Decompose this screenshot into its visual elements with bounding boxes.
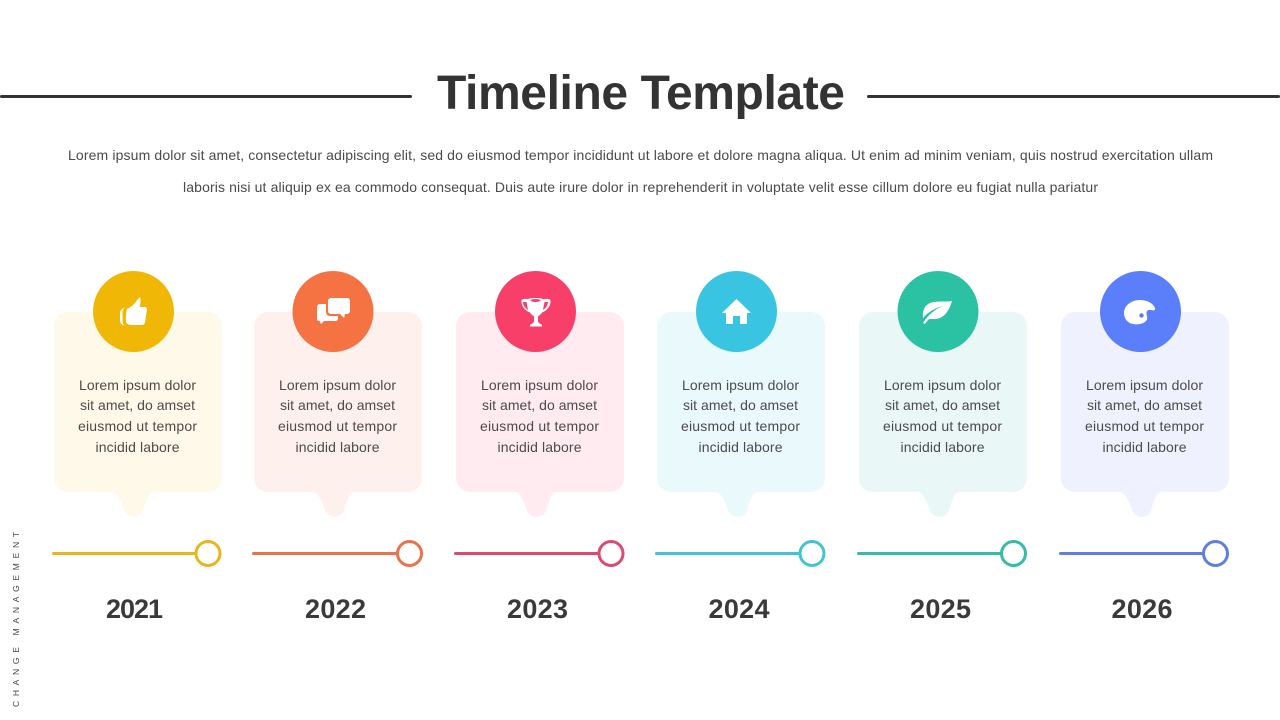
title: Timeline Template <box>437 67 845 120</box>
card text 2023: sit amet, do amset <box>482 397 597 413</box>
icon: thumbs up <box>93 271 174 352</box>
card text 2023: incidid labore <box>498 439 582 455</box>
icon: palette <box>1100 271 1181 352</box>
card text 2025 <box>883 377 1002 455</box>
intro text: laboris nisi ut aliquip ex ea commodo consequat. Duis aute irure dolor in reprehenderit in voluptate velit esse cillum dolore eu fugiat nulla pariatur <box>183 179 1098 195</box>
icon: speech bubbles <box>292 271 374 352</box>
card text 2023: Lorem ipsum dolor <box>481 377 598 393</box>
panel: 2025 <box>857 271 1027 624</box>
card text 2026: eiusmod ut tempor <box>1085 418 1204 434</box>
card 2025 <box>859 312 1027 517</box>
card text 2021 <box>78 377 197 455</box>
card text 2022: eiusmod ut tempor <box>278 418 397 434</box>
card text 2021: eiusmod ut tempor <box>78 418 197 434</box>
card 2024 <box>657 312 825 517</box>
card text 2025: sit amet, do amset <box>885 397 1000 413</box>
timeline marker 2022 <box>252 542 422 566</box>
panel: 2026 <box>1059 271 1229 624</box>
year 2021: 2021 <box>106 594 163 624</box>
panel: 2024 <box>655 271 825 624</box>
card text 2024 <box>681 377 800 455</box>
year 2026: 2026 <box>1112 594 1172 624</box>
year 2022: 2022 <box>305 594 366 624</box>
panel: 2023 <box>454 271 624 624</box>
icon: leaf <box>898 271 978 352</box>
year 2025: 2025 <box>910 594 971 624</box>
timeline marker 2023 <box>454 542 623 566</box>
panel: 2022 <box>252 271 422 624</box>
card text 2024: eiusmod ut tempor <box>681 418 800 434</box>
icon: trophy <box>495 271 576 352</box>
year 2023: 2023 <box>507 594 568 624</box>
timeline marker 2021 <box>52 542 220 566</box>
card text 2022: sit amet, do amset <box>280 397 395 413</box>
card 2026 <box>1061 312 1229 517</box>
card text 2025: eiusmod ut tempor <box>883 418 1002 434</box>
card text 2022: incidid labore <box>296 439 380 455</box>
timeline marker 2025 <box>857 542 1026 566</box>
card text 2025: incidid labore <box>900 439 985 455</box>
card text 2023 <box>480 377 599 455</box>
intro text <box>68 147 1213 195</box>
card text 2026: sit amet, do amset <box>1087 397 1202 413</box>
card text 2026 <box>1085 377 1204 455</box>
card text 2025: Lorem ipsum dolor <box>884 377 1001 393</box>
title <box>0 67 1280 120</box>
card text 2022 <box>278 377 397 455</box>
card text 2026: incidid labore <box>1102 439 1187 455</box>
panel: 2021 <box>52 271 222 624</box>
timeline marker 2026 <box>1059 542 1228 566</box>
card text 2024: sit amet, do amset <box>683 397 798 413</box>
card text 2021: Lorem ipsum dolor <box>79 377 196 393</box>
card 2023 <box>456 312 624 517</box>
card text 2024: incidid labore <box>698 439 783 455</box>
card text 2022: Lorem ipsum dolor <box>279 377 396 393</box>
card 2022 <box>254 312 422 517</box>
card text 2024: Lorem ipsum dolor <box>682 377 799 393</box>
vertical side label: CHANGE MANAGEMENT <box>11 532 21 707</box>
year 2024: 2024 <box>708 594 770 624</box>
card text 2021: incidid labore <box>96 439 180 455</box>
card 2021 <box>54 312 222 517</box>
card text 2021: sit amet, do amset <box>80 397 195 413</box>
card text 2023: eiusmod ut tempor <box>480 418 599 434</box>
icon: house <box>696 271 777 352</box>
timeline marker 2024 <box>655 542 824 566</box>
intro text: Lorem ipsum dolor sit amet, consectetur adipiscing elit, sed do eiusmod tempor incididunt ut labore et dolore magna aliqua. Ut enim ad minim veniam, quis nostrud exercitation ullam <box>68 147 1213 163</box>
card text 2026: Lorem ipsum dolor <box>1086 377 1203 393</box>
